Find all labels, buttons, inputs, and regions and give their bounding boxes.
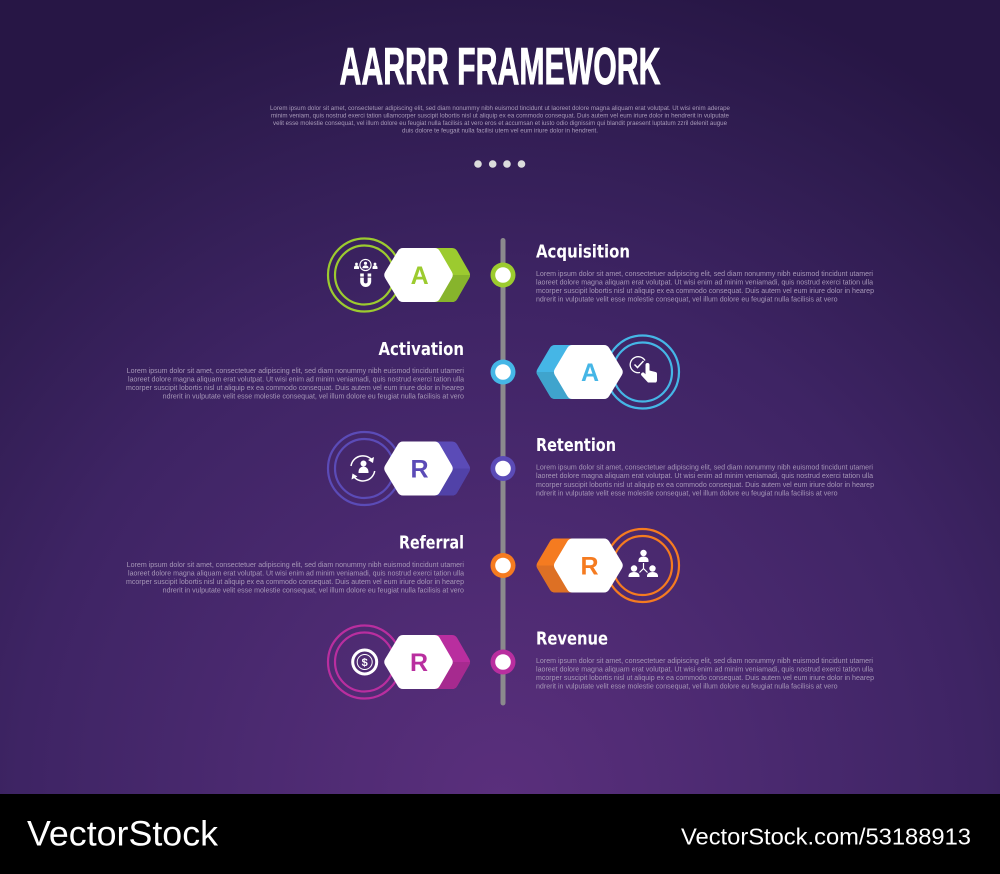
concentric rings bbox=[328, 238, 401, 312]
step 3 text bbox=[536, 436, 874, 498]
icon: person with cycle arrows bbox=[351, 456, 375, 481]
step 1: acquisition graphic bbox=[328, 238, 464, 312]
timeline node 3 bbox=[490, 456, 516, 481]
step 5 text: laoreet dolore magna aliquam erat volutpat. Ut wisi enim ad minim veniamadi, quis nostrud exerci tation ulla bbox=[536, 667, 873, 674]
icon: check and pointing hand bbox=[630, 357, 657, 382]
letter: R bbox=[580, 552, 599, 580]
timeline bar bbox=[500, 238, 506, 706]
intro paragraph: minim veniam, quis nostrud exerci tation ullamcorper suscipit lobortis nisl ut aliquip ex ea commodo consequat. Duis autem vel eum iriure dolor in hendrerit in vulputate bbox=[271, 112, 729, 120]
intro paragraph: velit esse molestie consequat, vel illum dolore eu feugiat nulla facilisis at vero eros et accumsan et iusto odio dignissim qui blandit praesent luptatum zzril delenit augue bbox=[273, 120, 727, 127]
concentric rings bbox=[328, 626, 401, 698]
back hexagon bbox=[415, 641, 464, 683]
step 2: activation graphic bbox=[543, 336, 679, 408]
pagination dots bbox=[474, 160, 525, 168]
step 5 text: ndrerit in vulputate velit esse molestie consequat, vel illum dolore eu feugiat nulla facilisis at vero bbox=[536, 684, 838, 691]
step 4 text: Referral bbox=[399, 534, 464, 554]
step 3 text: Lorem ipsum dolor sit amet, consectetuer adipiscing elit, sed diam nonummy nibh euismod tincidunt utameri bbox=[536, 464, 873, 472]
step 2 text bbox=[126, 340, 464, 401]
step 5: revenue graphic bbox=[328, 626, 464, 698]
step 4 text: laoreet dolore magna aliquam erat volutpat. Ut wisi enim ad minim veniamadi, quis nostrud exerci tation ulla bbox=[128, 570, 464, 578]
letter: A bbox=[411, 262, 429, 290]
intro paragraph: Lorem ipsum dolor sit amet, consectetuer adipiscing elit, sed diam nonummy nibh euismod tincidunt ut laoreet dolore magna aliquam erat volutpat. Ut wisi enim aderape bbox=[270, 105, 730, 112]
back hexagon bbox=[543, 544, 590, 586]
step 1 text bbox=[536, 242, 874, 304]
white hexagon bbox=[390, 254, 447, 296]
step 3 text: laoreet dolore magna aliquam erat volutpat. Ut wisi enim ad minim veniamadi, quis nostrud exerci tation ulla bbox=[536, 473, 873, 480]
timeline node 1 bbox=[490, 262, 516, 288]
back hexagon bbox=[415, 448, 464, 490]
white hexagon bbox=[560, 351, 617, 393]
step 5 text: Revenue bbox=[536, 630, 608, 650]
letter: R bbox=[410, 456, 429, 484]
step 2 text: mcorper suscipit lobortis nisl ut aliquip ex ea commodo consequat. Duis autem vel eum iriure dolor in hearep bbox=[126, 385, 464, 392]
concentric rings bbox=[328, 432, 401, 505]
step 3 text: Retention bbox=[536, 436, 616, 456]
timeline node 4 bbox=[490, 553, 516, 578]
letter: R bbox=[410, 649, 428, 677]
title: AARRR FRAMEWORK bbox=[340, 38, 661, 96]
white hexagon bbox=[390, 448, 447, 490]
back hexagon bbox=[415, 254, 464, 296]
icon: magnet attracting people bbox=[354, 259, 378, 285]
timeline node 2 bbox=[490, 360, 516, 384]
footer image id: VectorStock.com/53188913 bbox=[681, 824, 971, 850]
step 1 text: mcorper suscipit lobortis nisl ut aliquip ex ea commodo consequat. Duis autem vel eum iriure dolor in hearep bbox=[536, 288, 874, 295]
step 5 text: Lorem ipsum dolor sit amet, consectetuer adipiscing elit, sed diam nonummy nibh euismod tincidunt utameri bbox=[536, 658, 873, 665]
back hexagon bbox=[543, 351, 590, 393]
concentric rings bbox=[606, 336, 679, 408]
step 1 text: Acquisition bbox=[536, 242, 630, 262]
icon: referral network bbox=[628, 550, 658, 577]
step 2 text: Lorem ipsum dolor sit amet, consectetuer adipiscing elit, sed diam nonummy nibh euismod tincidunt utameri bbox=[127, 368, 464, 375]
step 4: referral graphic bbox=[543, 529, 679, 602]
white hexagon bbox=[390, 641, 447, 683]
timeline node 5 bbox=[490, 650, 516, 674]
step 3 text: ndrerit in vulputate velit esse molestie consequat, vel illum dolore eu feugiat nulla facilisis at vero bbox=[536, 490, 838, 498]
step 4 text bbox=[126, 534, 464, 595]
footer logo: VectorStock bbox=[27, 814, 219, 854]
step 4 text: mcorper suscipit lobortis nisl ut aliquip ex ea commodo consequat. Duis autem vel eum iriure dolor in hearep bbox=[126, 579, 464, 586]
step 2 text: ndrerit in vulputate velit esse molestie consequat, vel illum dolore eu feugiat nulla facilisis at vero bbox=[163, 394, 464, 401]
intro paragraph bbox=[270, 105, 730, 134]
step 1 text: ndrerit in vulputate velit esse molestie consequat, vel illum dolore eu feugiat nulla facilisis at vero bbox=[536, 297, 838, 304]
step 5 text bbox=[536, 630, 874, 691]
step 2 text: laoreet dolore magna aliquam erat volutpat. Ut wisi enim ad minim veniamadi, quis nostrud exerci tation ulla bbox=[128, 377, 464, 384]
step 4 text: Lorem ipsum dolor sit amet, consectetuer adipiscing elit, sed diam nonummy nibh euismod tincidunt utameri bbox=[127, 562, 464, 569]
footer bar bbox=[0, 794, 1000, 874]
intro paragraph: duis dolore te feugait nulla facilisi utem vel eum iriure dolor in hendrerit. bbox=[402, 128, 598, 134]
letter: A bbox=[581, 359, 599, 387]
icon: dollar coin: $ bbox=[362, 657, 368, 669]
step 1 text: laoreet dolore magna aliquam erat volutpat. Ut wisi enim ad minim veniamadi, quis nostrud exerci tation ulla bbox=[536, 280, 873, 287]
step 3: retention graphic bbox=[328, 432, 464, 505]
step 1 text: Lorem ipsum dolor sit amet, consectetuer adipiscing elit, sed diam nonummy nibh euismod tincidunt utameri bbox=[536, 271, 873, 278]
step 3 text: mcorper suscipit lobortis nisl ut aliquip ex ea commodo consequat. Duis autem vel eum iriure dolor in hearep bbox=[536, 482, 874, 489]
step 4 text: ndrerit in vulputate velit esse molestie consequat, vel illum dolore eu feugiat nulla facilisis at vero bbox=[163, 588, 464, 595]
concentric rings bbox=[606, 529, 679, 602]
white hexagon bbox=[560, 544, 617, 586]
step 2 text: Activation bbox=[378, 340, 464, 360]
step 5 text: mcorper suscipit lobortis nisl ut aliquip ex ea commodo consequat. Duis autem vel eum iriure dolor in hearep bbox=[536, 675, 874, 682]
